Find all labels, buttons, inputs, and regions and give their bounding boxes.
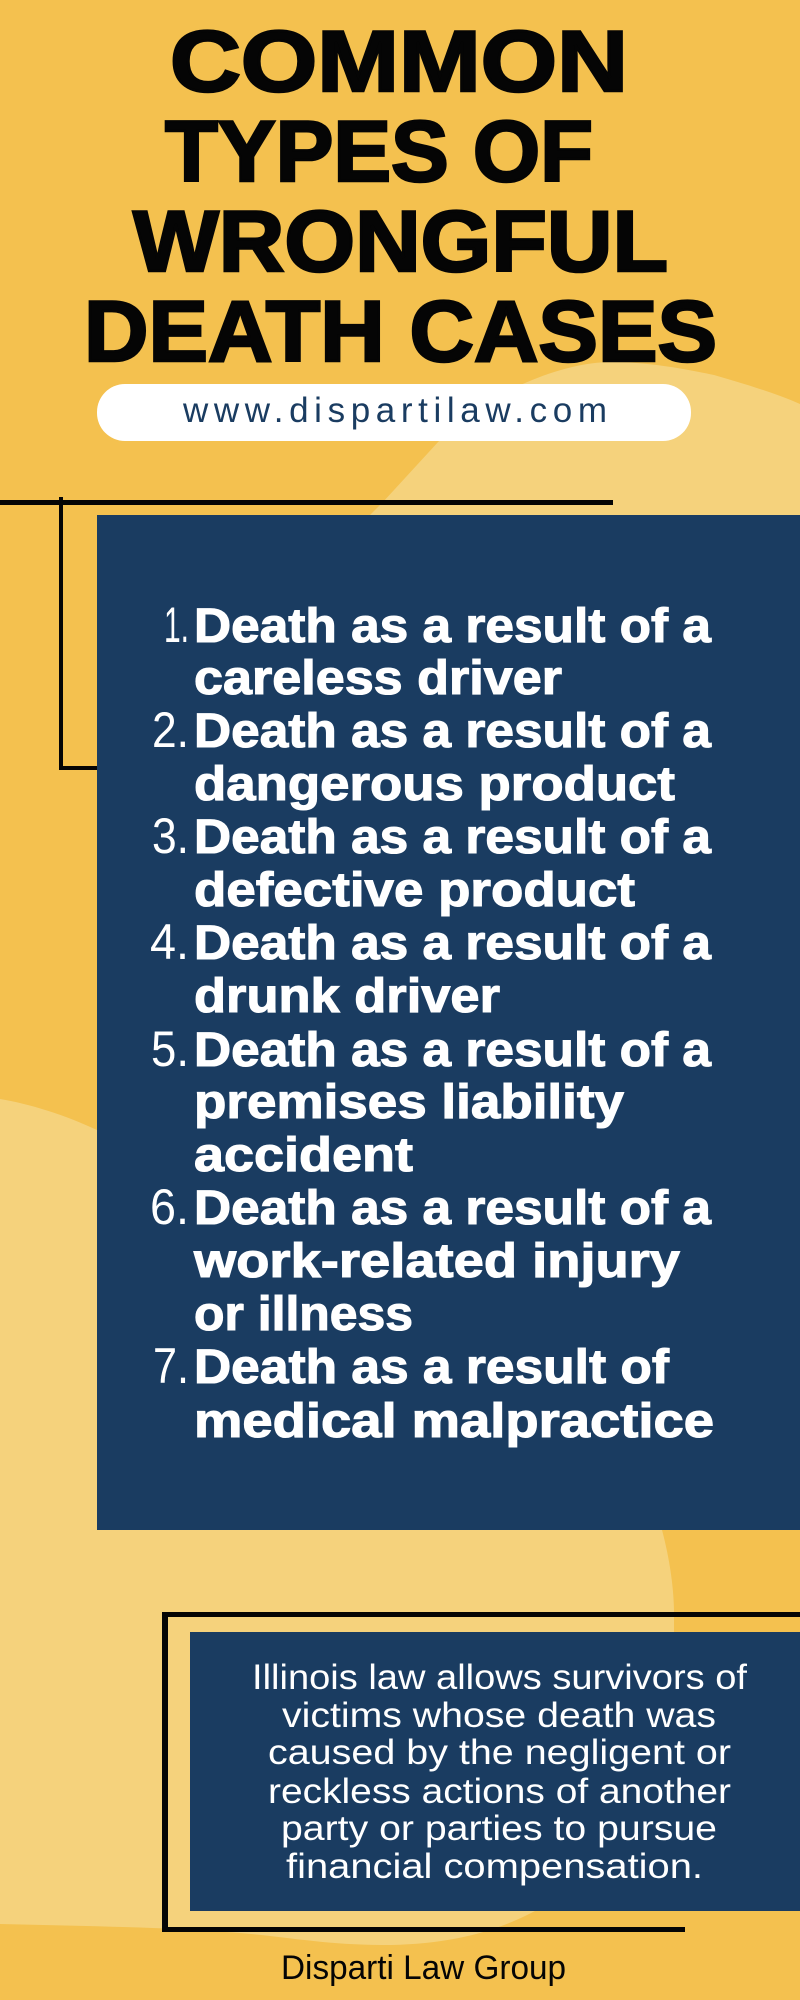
panel: Illinois law note (190, 1632, 800, 1911)
list item 2: 2. (152, 702, 189, 758)
list item 4 (150, 914, 711, 1023)
title: WRONGFUL (133, 194, 668, 290)
panel: Illinois law note: Illinois law allows survivors of (252, 1658, 747, 1697)
list item 1: 1. (164, 597, 189, 653)
list item 6: or illness (194, 1288, 413, 1341)
list item 7: medical malpractice (194, 1395, 714, 1448)
list item 6: work-related injury (193, 1235, 680, 1288)
panel: Illinois law note: victims whose death was (282, 1696, 716, 1735)
list item 7: 7. (153, 1338, 189, 1394)
list item 3 (152, 808, 711, 917)
background shape: top right blob (360, 362, 800, 525)
footer: firm name: Disparti Law Group (281, 1949, 566, 1987)
website pill: www.dispartilaw.com (182, 391, 607, 430)
panel: numbered list (97, 515, 800, 1530)
list item 5: accident (194, 1129, 413, 1182)
list item 2: dangerous product (194, 758, 675, 811)
website pill (97, 384, 691, 441)
title: DEATH CASES (84, 284, 717, 380)
list item 7 (153, 1338, 714, 1448)
list item 3: 3. (152, 808, 189, 864)
panel: Illinois law note: financial compensation. (286, 1847, 703, 1886)
list item 1: Death as a result of a (194, 600, 711, 653)
panel: Illinois law note: reckless actions of another (268, 1772, 731, 1811)
background shape: lower left blob (0, 1099, 674, 1945)
list item 4: drunk driver (194, 970, 500, 1023)
list item 1: careless driver (194, 652, 562, 705)
list item 6: Death as a result of a (194, 1182, 711, 1235)
list item 5: 5. (151, 1021, 189, 1077)
title: COMMON (170, 14, 628, 110)
list item 5: Death as a result of a (194, 1024, 711, 1077)
list item 2: Death as a result of a (194, 705, 711, 758)
bracket frame around note panel (162, 1612, 800, 1932)
list item 6: 6. (150, 1179, 189, 1235)
list item 3: defective product (194, 864, 635, 917)
list item 4: 4. (150, 914, 189, 970)
list item 2 (152, 702, 711, 811)
panel: Illinois law note: party or parties to pursue (281, 1809, 717, 1848)
list item 1 (164, 597, 711, 705)
list item 7: Death as a result of (194, 1341, 670, 1394)
title (84, 14, 717, 380)
panel: Illinois law note: caused by the negligent or (268, 1733, 731, 1772)
list item 4: Death as a result of a (194, 917, 711, 970)
list item 6 (150, 1179, 711, 1341)
list item 5 (151, 1021, 711, 1182)
bracket lines around list panel (0, 497, 613, 770)
title: TYPES OF (165, 104, 593, 200)
list item 3: Death as a result of a (194, 811, 711, 864)
list item 5: premises liability (194, 1076, 624, 1129)
